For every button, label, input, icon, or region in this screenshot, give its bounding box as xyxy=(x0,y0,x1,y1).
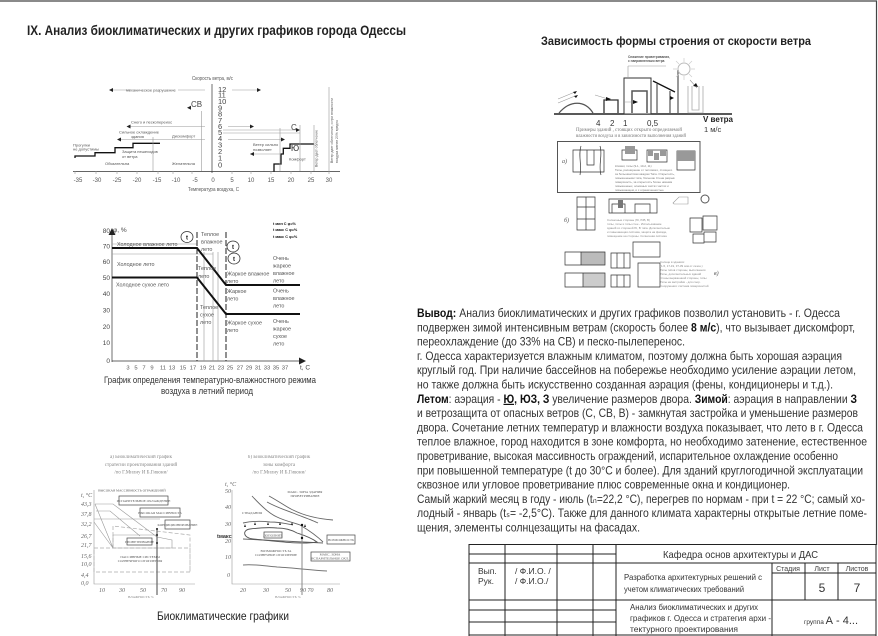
x-axis numbers: 25 xyxy=(308,178,315,184)
x-axis numbers: 25 xyxy=(227,366,233,372)
y-axis numbers: 3 xyxy=(218,141,222,150)
humidity curves xyxy=(112,248,300,314)
y-axis numbers: 0 xyxy=(106,358,110,365)
conclusion text block: сквозное или угловое проветривание плюс современные окна и кондиционер. xyxy=(417,478,790,492)
x-axis numbers: 31 xyxy=(255,366,261,372)
ground line xyxy=(554,113,732,115)
legend: t мин С φ=% xyxy=(273,222,297,226)
x-axis numbers xyxy=(126,366,288,372)
x-axis numbers: 13 xyxy=(169,366,175,372)
conclusion text block: переохлаждение (до 33% на СВ) и песко-пылеперенос. xyxy=(417,335,685,349)
regime labels: Очень xyxy=(273,256,289,262)
x-axis numbers: -25 xyxy=(113,178,122,184)
plan panel b note xyxy=(607,218,670,238)
chart: comfort zone bioclimatic graph: ИСПАРИТЕЛЬНОЕ ОХЛ. xyxy=(311,556,349,560)
regime labels: сухое xyxy=(200,312,214,318)
top note: с направленным ветра xyxy=(628,59,665,63)
regime labels: Жаркое влажное xyxy=(227,272,269,278)
plan panel c drawings xyxy=(581,252,605,265)
graph heading: б) Биоклиматический график xyxy=(248,455,311,460)
chart: comfort zone bioclimatic graph: 20 xyxy=(240,588,246,594)
chart annotations: здания xyxy=(131,134,144,139)
wind scale: 0,5 xyxy=(647,119,659,128)
x-axis numbers: 15 xyxy=(268,178,275,184)
department: Кафедра основ архитектуры и ДАС xyxy=(663,549,818,561)
chart: comfort zone bioclimatic graph: 30 xyxy=(262,588,269,594)
x-axis numbers: 0 xyxy=(211,178,215,184)
regime labels: лето xyxy=(227,328,238,334)
plan panel a note: повышенными типа, большие Стена разрыв xyxy=(615,176,675,180)
sheet title: тектурного проектирования xyxy=(630,624,738,634)
x-axis numbers: 29 xyxy=(246,366,252,372)
axis xyxy=(94,490,195,584)
project title: учетом климатических требований xyxy=(624,584,744,594)
chart: comfort zone bioclimatic graph: 10 xyxy=(225,555,231,561)
chart: building design bioclimatic graph: 26,7 xyxy=(81,534,92,540)
x-axis numbers: -15 xyxy=(153,178,162,184)
plan panel a xyxy=(558,142,700,192)
conclusion text block xyxy=(417,306,867,534)
x-axis numbers: 3 xyxy=(126,366,130,372)
chart annotations: Желательна xyxy=(172,161,196,166)
conclusion text block: Летом: аэрация - Ю, ЮЗ, З увеличение размеров двора. Зимой: аэрация в направлении З xyxy=(417,392,857,406)
plan panel a note: повышенных, основных частях частях и xyxy=(615,184,669,188)
chart: comfort zone bioclimatic graph xyxy=(217,455,355,599)
legend xyxy=(273,222,298,239)
heading: wind and building form: Зависимость формы строения от скорости ветра xyxy=(541,34,811,48)
wind speed label: V ветра xyxy=(703,115,734,124)
chart: comfort zone bioclimatic graph: ПРОВЕТРИВАНИЕ xyxy=(290,494,320,498)
wind arrows xyxy=(558,80,697,103)
x-axis numbers: 23 xyxy=(218,366,224,372)
plan panel c note: Типы, дополнительных зданий xyxy=(660,272,701,276)
regime labels: влажное xyxy=(273,271,294,277)
graph heading: стратегии проектирования зданий xyxy=(105,463,178,468)
y-axis numbers xyxy=(218,85,226,170)
thin guides xyxy=(112,244,218,361)
chart: comfort zone bioclimatic graph: СОЛНЕЧНОЕ ОТОПЛЕНИЕ xyxy=(255,553,297,557)
sheet headings: Листов xyxy=(846,566,869,573)
x-axis numbers: 5 xyxy=(230,178,234,184)
chart: comfort zone bioclimatic graph: 80 xyxy=(327,588,333,594)
plan panel c note: Типы типов стороны, выполнения xyxy=(660,268,706,272)
axis title: wind speed: Скорость ветра, м/с xyxy=(192,76,233,82)
regime labels: лето xyxy=(227,279,238,285)
regime labels: влажное xyxy=(273,296,294,302)
chart: comfort zone bioclimatic graph: МАКС. ЗОНА xyxy=(320,552,341,556)
plan panel a note: за большинством каждом Типа. Открытость, xyxy=(615,172,675,176)
y-axis numbers: 9 xyxy=(218,104,222,112)
signature rows: Вып. xyxy=(478,566,497,576)
chart annotations: не допустимы xyxy=(73,146,99,152)
x-axis numbers: 21 xyxy=(209,366,215,372)
plan panel c note: Солнце в зданиях: xyxy=(660,260,685,264)
stepped cold curve xyxy=(75,143,160,158)
plan panel a note: повышающем, и с ограниченностью xyxy=(615,188,664,192)
regime labels: влажное xyxy=(201,240,222,246)
chart annotations: Дискомфорт xyxy=(172,134,195,138)
guide lines and arrows xyxy=(110,87,329,171)
hill xyxy=(559,103,593,113)
x-axis numbers: 5 xyxy=(134,366,138,372)
y-axis numbers: 5 xyxy=(218,128,222,137)
x-axis numbers: 15 xyxy=(180,366,186,372)
chart: building design bioclimatic graph: 50 xyxy=(140,588,146,594)
x-axis title: ВЛАЖНОСТЬ % xyxy=(275,595,301,599)
chart annotations: воздуха менее 20% вредно xyxy=(334,119,339,163)
chart annotations: Прогулки xyxy=(73,142,90,148)
chart: comfort zone bioclimatic graph: 40 xyxy=(225,504,231,511)
panel labels: б) xyxy=(564,217,569,224)
caption: bioclimatic graphs: Биоклиматические графики xyxy=(157,609,289,623)
x-axis numbers: -20 xyxy=(133,178,142,184)
x-axis numbers: 17 xyxy=(190,366,196,372)
y-axis numbers: 80 xyxy=(103,228,110,235)
wind scale xyxy=(596,119,659,128)
plan panel c note: (1-5, 17-19, 37-39 зим от сезон.) xyxy=(660,264,703,268)
chart: building design bioclimatic graph: ВЫСОКАЯ МАССИВНОСТЬ ОГРАЖДЕНИЙ xyxy=(98,488,166,492)
chart: comfort zone bioclimatic graph: 50 xyxy=(285,588,291,594)
plan panel c note xyxy=(660,260,709,288)
title: IX. Анализ биоклиматических и других графиков города Одессы xyxy=(27,22,406,38)
chart: building design bioclimatic graph xyxy=(80,455,197,599)
signature rows: / Ф.И.О. / xyxy=(515,566,551,576)
wind scale: 4 xyxy=(596,119,601,128)
plan panel b xyxy=(577,197,657,230)
awning xyxy=(653,81,675,92)
axis title: temperature: Температура воздуха, С xyxy=(188,187,239,193)
chart annotations xyxy=(73,88,339,167)
chart annotations: Ветер дает облегчение xyxy=(314,129,318,167)
regime labels: лето xyxy=(227,296,238,302)
chart: comfort zone bioclimatic graph: СТРАДАНИЯ xyxy=(242,511,263,515)
graph heading xyxy=(248,455,311,476)
chart: building design bioclimatic graph: ПРОВЕТРИВАНИЕ xyxy=(125,540,154,544)
chart: building design bioclimatic graph: СОЛНЕЧНОГО ОТОПЛЕНИЯ xyxy=(118,559,163,563)
axis xyxy=(232,490,340,584)
regime labels: Холодное лето xyxy=(117,262,154,268)
plan panel c note: Типы на застройки - для соор. xyxy=(660,280,701,284)
plan panel a note: поверхность, за открытость более нижним xyxy=(615,180,672,184)
signature rows: / Ф.И.О./ xyxy=(515,576,549,586)
sheet title: графиков г. Одесса и стратегия архи - xyxy=(630,613,771,623)
plan panel c note: Сооружения: система поверхностей xyxy=(660,284,709,288)
x-axis numbers: 7 xyxy=(142,366,146,372)
regime labels: Холодное сухое лето xyxy=(116,282,169,288)
plan panel b note: Солнечные стороны (Ю, ЮВ, В) xyxy=(607,218,650,222)
chart: building design bioclimatic graph: 32,2 xyxy=(80,522,92,528)
y-axis numbers: 2 xyxy=(218,147,222,156)
project title: Разработка архитектурных решений с xyxy=(624,572,763,582)
chart: comfort zone bioclimatic graph: 20 xyxy=(225,539,231,545)
x-axis numbers: -5 xyxy=(192,178,198,184)
main building xyxy=(624,78,651,114)
chart annotations: Ветер дает облегчение, и при влажности xyxy=(329,98,334,163)
caption: влажности воздуха и в зависимости выполнения зданий xyxy=(576,134,686,139)
y-axis numbers: 10 xyxy=(103,340,110,347)
chart annotations: Ветер сильно xyxy=(253,142,279,147)
y-axis numbers: 40 xyxy=(103,291,110,298)
regime labels: Теплое xyxy=(198,266,216,272)
chart: building design bioclimatic graph: 37,8 xyxy=(80,512,92,518)
x-axis numbers: 27 xyxy=(237,366,243,372)
comfort boxes xyxy=(264,532,355,561)
chart: building design bioclimatic graph: 15,6 xyxy=(81,554,92,560)
regime labels: сухое xyxy=(273,334,287,340)
chart: wind speed vs air temperature xyxy=(73,76,340,193)
chart annotations: Комфорт xyxy=(289,156,306,162)
plan panel a drawings xyxy=(573,146,695,175)
chart: building design bioclimatic graph: t, °C xyxy=(81,492,93,499)
regime labels xyxy=(116,232,294,348)
chart: comfort zone bioclimatic graph: t, °C xyxy=(225,481,237,488)
graph heading: /по Г.Милну И Б.Гивони/ xyxy=(252,470,306,476)
graph heading xyxy=(105,455,178,476)
y-axis numbers: 1 xyxy=(218,154,222,162)
y-axis numbers: 20 xyxy=(103,324,110,331)
plan panel b note: типы, типы и типы стен - Использование xyxy=(607,222,662,226)
regime labels: лето xyxy=(273,304,284,310)
y-axis numbers: 6 xyxy=(218,122,222,131)
sheet numbers: 5 xyxy=(819,581,826,595)
signature rows xyxy=(478,566,551,586)
sheet headings: Стадия xyxy=(776,566,800,573)
chart annotations: Защита пешеходов xyxy=(122,149,158,154)
chart: building design bioclimatic graph: ПАССИВНЫЕ СИСТЕМЫ xyxy=(120,555,160,559)
panel labels: а) xyxy=(562,158,567,165)
project title xyxy=(624,572,763,594)
sheet title xyxy=(630,602,771,634)
conclusion text block: подвержен зимой интенсивным ветрам (скорость более 8 м/с), что вызывает дискомфорт, xyxy=(417,320,855,334)
axes xyxy=(112,232,304,362)
chart: building design bioclimatic graph: 10 xyxy=(99,588,105,594)
strategy zones xyxy=(94,504,172,548)
sheet headings: Лист xyxy=(814,566,830,573)
chart: building design bioclimatic graph: ВЫСОКАЯ МАССИВНОСТЬ xyxy=(138,511,182,515)
regime labels: лето xyxy=(273,278,284,284)
x-axis title: ВЛАЖНОСТЬ % xyxy=(128,595,154,599)
regime labels: лето xyxy=(201,247,212,253)
caption: Примеры зданий , стоящих открыто определяемой xyxy=(576,128,682,133)
x-axis numbers: 20 xyxy=(288,178,295,184)
chart annotations: механическое разрушение xyxy=(126,88,176,92)
sheet headings xyxy=(776,566,869,573)
y-axis numbers: 30 xyxy=(103,308,110,314)
sun xyxy=(678,63,690,75)
x-axis numbers: -10 xyxy=(172,178,181,184)
x-axis numbers: 11 xyxy=(160,366,166,372)
sheet numbers: 7 xyxy=(854,581,861,595)
chart: building design bioclimatic graph: 70 xyxy=(161,588,167,594)
chart annotations: от ветра xyxy=(122,154,138,159)
chart: comfort zone bioclimatic graph: МАКС. ЗОНА ЗДАНИЯ xyxy=(288,490,323,494)
graph heading: а) Биоклиматический график xyxy=(110,455,173,460)
chart caption: График определения температурно-влажностного режима xyxy=(104,375,317,386)
tall building xyxy=(688,86,703,113)
plan panel b note: и повышающая система, защита на фасаде, xyxy=(607,230,667,234)
x-axis numbers xyxy=(74,178,333,184)
x-axis numbers: 10 xyxy=(248,178,255,184)
plan panel a note xyxy=(615,164,675,192)
chart: comfort zone bioclimatic graph: ВОЗМОЖНОСТЬ xyxy=(328,538,354,542)
regime labels: жаркое xyxy=(273,326,291,332)
y-axis numbers: 60 xyxy=(103,259,110,266)
cluster plan xyxy=(690,216,717,243)
chart: building design bioclimatic graph: 10,0 xyxy=(81,562,92,568)
chart: summer temperature-humidity regime: t xyxy=(186,236,188,242)
y-axis numbers: 11 xyxy=(218,90,226,100)
y-axis numbers: 70 xyxy=(103,244,110,250)
regime labels: Очень xyxy=(273,319,289,325)
temperature markers xyxy=(181,232,240,264)
chart annotations: Снего и пескопереиос xyxy=(131,120,172,124)
x-axis numbers: 9 xyxy=(150,366,154,372)
stamp grid xyxy=(469,544,876,636)
chart: wind speed vs air temperature: С xyxy=(291,123,297,132)
sheet numbers xyxy=(819,581,861,595)
stepped warm curve xyxy=(274,144,314,172)
y-axis numbers: 50 xyxy=(103,275,110,282)
diagram: building silhouettes and wind speed: 1 м/с xyxy=(704,125,721,134)
graph heading: /по Г.Милну И Б.Гивони/ xyxy=(114,470,168,476)
chart annotations: Обязательна xyxy=(105,161,130,166)
y-axis numbers: 4 xyxy=(218,134,222,143)
wind scale: 1 xyxy=(623,119,628,128)
chart: summer temperature-humidity regime: t xyxy=(232,245,234,251)
x-axis numbers: -35 xyxy=(74,178,83,184)
axis label phi: φ, % xyxy=(113,227,127,234)
chart caption xyxy=(104,375,317,397)
x-axis numbers: 30 xyxy=(326,178,333,184)
signature rows: Рук. xyxy=(478,576,494,586)
legend: t макс С φ=% xyxy=(273,228,298,232)
t max label: tмакс xyxy=(217,534,232,540)
axis label t: t, С xyxy=(300,364,310,372)
caption xyxy=(576,128,686,139)
regime labels: жаркое xyxy=(273,264,291,270)
y-axis numbers: 10 xyxy=(218,97,226,106)
y-axis numbers xyxy=(103,228,110,365)
plan panel b note: зданий со стороной Ю, В типа. Дополнительно xyxy=(607,226,670,230)
y-axis numbers: 12 xyxy=(218,85,226,94)
plan panel a note: Климат, типы (9-1, 10-2, 11) xyxy=(615,164,652,168)
panel labels: в) xyxy=(714,270,719,277)
regime labels: лето xyxy=(198,274,209,280)
x-axis numbers: 19 xyxy=(200,366,206,372)
plan panel b note: помещение на стороны. Солнечная система xyxy=(607,234,667,238)
chart: building design bioclimatic graph: 43,3 xyxy=(81,501,92,508)
regime labels: Теплое xyxy=(201,232,219,238)
chart: comfort zone bioclimatic graph: 90 70 xyxy=(300,588,314,594)
chart: wind speed vs air temperature: Ю xyxy=(291,144,299,153)
legend: t макс С φ=% xyxy=(273,235,298,239)
x-axis numbers: -30 xyxy=(93,178,102,184)
top note: Снижение проветривания, xyxy=(628,55,670,59)
plan panel a note: Типы, расширение от теплового, стоящего xyxy=(615,168,673,172)
small building xyxy=(604,100,618,113)
chart: summer temperature-humidity regime: t xyxy=(233,257,235,263)
chart caption: воздуха в летний период xyxy=(161,386,253,397)
chart: comfort zone bioclimatic graph: ВОЗМОЖНОСТЬ ЗА xyxy=(260,549,292,553)
x-axis numbers: 35 xyxy=(273,366,279,372)
regime labels: Жаркое xyxy=(227,289,246,295)
regime labels: лето xyxy=(273,342,284,348)
x-axis numbers: 37 xyxy=(282,366,288,372)
group: группа А - 4... xyxy=(804,615,858,627)
graph heading: зоны комфорта xyxy=(263,463,296,468)
title block xyxy=(469,544,876,636)
top note xyxy=(628,55,670,63)
conclusion text block: щения, элементы солнцезащиты на фасадах. xyxy=(417,520,640,534)
diagram: building silhouettes and wind speed xyxy=(554,55,734,139)
chart: building design bioclimatic graph: КОНДИЦИОНИРОВАНИЕ xyxy=(158,523,197,527)
chart annotations: позволяет xyxy=(253,147,272,152)
chart: building design bioclimatic graph: 30 xyxy=(118,588,125,594)
chart: comfort zone bioclimatic graph: 50 xyxy=(225,489,231,495)
solar and roof icons xyxy=(673,197,688,204)
sheet title: Анализ биоклиматических и других xyxy=(630,602,759,612)
regime labels: Очень xyxy=(273,288,289,294)
regime labels: Холодное влажное лето xyxy=(117,242,177,248)
chart: building design bioclimatic graph: 0,0 xyxy=(81,581,88,587)
chart: comfort zone bioclimatic graph: ДОПОЛНИТ. xyxy=(263,534,283,538)
chart annotations: Сильное охлаждение xyxy=(119,130,160,134)
chart: comfort zone bioclimatic graph: 0 xyxy=(227,573,230,579)
chart: building design bioclimatic graph: 90 xyxy=(179,588,185,594)
panel labels xyxy=(562,158,719,277)
diagram: building plans xyxy=(558,142,719,288)
comfort curves xyxy=(243,496,333,543)
x-axis numbers: 33 xyxy=(264,366,270,372)
regime labels: Жаркое сухое xyxy=(227,320,262,326)
chart: summer temperature-humidity regime xyxy=(103,222,317,397)
plan panel c note: Стены выраженной стороны, типы xyxy=(660,276,706,280)
y-axis numbers: 0 xyxy=(218,160,222,170)
strategy boxes xyxy=(119,496,190,545)
chart: comfort zone bioclimatic graph: 30 xyxy=(224,522,231,528)
wind scale: 2 xyxy=(610,119,615,128)
y-axis numbers: 7 xyxy=(218,116,222,125)
regime labels: Теплое xyxy=(200,305,218,311)
y-axis numbers: 8 xyxy=(218,110,222,119)
chart: building design bioclimatic graph: ИСПАРИТЕЛЬНОЕ ОХЛАЖДЕНИЕ xyxy=(117,499,170,503)
chart: building design bioclimatic graph: 21,7 xyxy=(81,543,92,549)
chart: building design bioclimatic graph: 4,4 xyxy=(81,572,88,579)
regime labels: лето xyxy=(200,320,211,326)
wind direction labels: СВ xyxy=(191,100,202,109)
